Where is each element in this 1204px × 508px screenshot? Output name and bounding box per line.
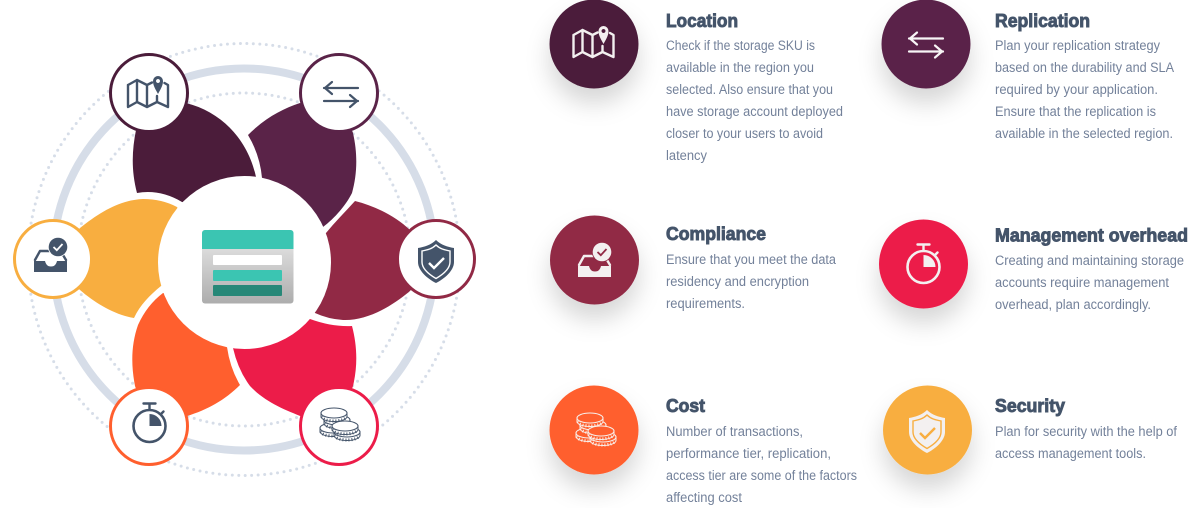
text: management overhead: Creating and maintaining storage bbox=[995, 253, 1184, 268]
text: security: access management tools. bbox=[995, 446, 1146, 461]
petal: compliance colour bbox=[280, 201, 436, 320]
text: location: closer to your users to avoid bbox=[666, 126, 823, 141]
panel: location bbox=[550, 0, 843, 163]
heading: management overhead: Management overhead bbox=[995, 226, 1188, 246]
text: location: have storage account deployed bbox=[666, 104, 843, 119]
heading: compliance: Compliance bbox=[666, 224, 766, 244]
text: replication: based on the durability and SLA bbox=[995, 60, 1174, 75]
heading: location: Location bbox=[666, 11, 738, 31]
node: inbox bbox=[14, 220, 92, 298]
panel: security bbox=[883, 386, 1177, 474]
panel: management overhead bbox=[879, 220, 1188, 312]
text: location: latency bbox=[666, 148, 707, 163]
node: arrows bbox=[300, 54, 378, 132]
node: coins bbox=[300, 388, 378, 464]
node: shield bbox=[398, 220, 474, 298]
text: cost: access tier are some of the factors bbox=[666, 468, 857, 483]
panel: replication bbox=[882, 0, 1174, 141]
node: stopwatch bbox=[110, 388, 188, 464]
text: replication: required by your application. bbox=[995, 82, 1158, 97]
icon: storage account bbox=[202, 230, 294, 304]
panel: compliance bbox=[550, 216, 836, 311]
heading: cost: Cost bbox=[666, 396, 705, 416]
petal: security colour bbox=[53, 199, 210, 318]
text: replication: available in the selected region. bbox=[995, 126, 1173, 141]
rings bbox=[28, 44, 460, 476]
heading: security: Security bbox=[995, 396, 1065, 416]
icon: security badge bbox=[883, 386, 972, 474]
node: map bbox=[110, 54, 188, 132]
icon: replication badge bbox=[882, 0, 970, 88]
text: compliance: Ensure that you meet the data bbox=[666, 252, 836, 267]
text: location: available in the region you bbox=[666, 60, 814, 75]
text: security bbox=[995, 424, 1177, 461]
icon: location badge bbox=[550, 0, 638, 88]
text: cost: Number of transactions, bbox=[666, 424, 803, 439]
text: location: selected. Also ensure that you bbox=[666, 82, 833, 97]
text: management overhead: overhead, plan accordingly. bbox=[995, 297, 1151, 312]
hexagonal diagram bbox=[14, 44, 474, 476]
petal: replication bbox=[248, 103, 356, 240]
text: replication: Plan your replication strategy bbox=[995, 38, 1160, 53]
text: cost bbox=[666, 424, 857, 505]
icon: management overhead badge bbox=[879, 220, 968, 308]
text: compliance bbox=[666, 252, 836, 311]
text: replication: Ensure that the replication is bbox=[995, 104, 1156, 119]
text: security: Plan for security with the help of bbox=[995, 424, 1177, 439]
text: replication bbox=[995, 38, 1174, 141]
petal: cost colour bbox=[233, 300, 356, 426]
text: compliance: residency and encryption bbox=[666, 274, 809, 289]
text: cost: performance tier, replication, bbox=[666, 446, 831, 461]
heading: replication: Replication bbox=[995, 11, 1090, 31]
text: location bbox=[666, 38, 843, 163]
text: compliance: requirements. bbox=[666, 296, 745, 311]
icon: compliance badge bbox=[550, 216, 639, 304]
text: location: Check if the storage SKU is bbox=[666, 38, 815, 53]
text: cost: affecting cost bbox=[666, 490, 742, 505]
centre hub bbox=[158, 176, 331, 349]
text: management overhead: accounts require management bbox=[995, 275, 1169, 290]
panel: cost bbox=[550, 386, 857, 505]
petal: location bbox=[133, 103, 256, 215]
icon: cost badge bbox=[550, 386, 638, 474]
petal: overhead colour bbox=[132, 293, 240, 426]
text: management overhead bbox=[995, 253, 1184, 312]
